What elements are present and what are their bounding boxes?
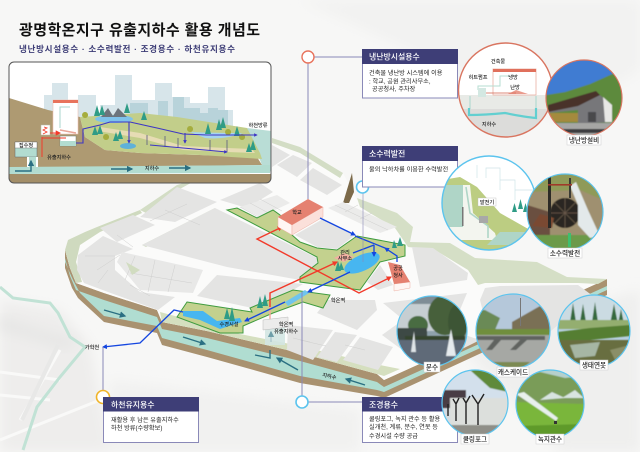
waterfall rocks [101, 108, 127, 117]
stream: 가학천 [0, 287, 85, 450]
photo: 생태연못 [558, 295, 630, 368]
diagram circle: 냉난방 시스템 [458, 43, 554, 139]
node: 하천유지 [96, 390, 110, 404]
map labels: 학온역 [331, 296, 345, 304]
map labels: 수경시설 [219, 320, 239, 328]
photo: 냉난방설비 [546, 60, 622, 137]
connector lines [103, 57, 363, 402]
water: pond and stream [183, 248, 383, 329]
panel: 조경용수: 실개천, 계류, 분수, 연못 등 [369, 423, 438, 431]
panel: 조경용수: 조경용수 [369, 400, 398, 410]
building: 공공청사: 공공 [393, 265, 403, 272]
small green in housing [126, 262, 140, 275]
subtitle: 냉난방시설용수 · 소수력발전 · 조경용수 · 하천유지용수 [19, 43, 235, 54]
building: 공공청사 [388, 262, 410, 291]
storage tank [60, 136, 76, 146]
title: 광명학온지구 유출지하수 활용 개념도 [19, 22, 260, 39]
building: 관리사무소: 관리 [340, 248, 350, 256]
building: 학교: 학교 [292, 208, 302, 216]
caption: 생태연못 [580, 360, 608, 370]
building: 공공청사: 청사 [393, 271, 403, 279]
river edge [247, 128, 271, 172]
rock cliff [343, 173, 354, 203]
groundwater flow arrows [104, 310, 365, 385]
blue inset flow [76, 122, 257, 152]
inset labels: 하천방류 [248, 121, 268, 129]
collection well [15, 141, 38, 167]
red heating line [42, 133, 66, 157]
skyline [44, 75, 233, 126]
inset labels: 지하수 [145, 164, 159, 172]
collection well: 집수정 [19, 141, 33, 149]
panel: 냉난방시설용수 [362, 49, 458, 98]
caption: 캐스케이드: 캐스케이드 [498, 368, 528, 376]
panel: 냉난방시설용수: : 학교, 공원 관리사무소, [369, 78, 431, 86]
panel: 소수력발전: 소수력발전 [369, 148, 405, 158]
pond and upper water [95, 115, 243, 149]
caption: 생태연못: 생태연못 [582, 360, 606, 370]
panel: 소수력발전 [362, 146, 458, 187]
building [53, 100, 78, 134]
panel: 하천유지용수: 하천 방류(수량확보) [111, 424, 162, 432]
map labels [85, 296, 345, 381]
map labels: 지하수 [322, 371, 337, 381]
panel: 하천유지용수: 하천유지용수 [111, 400, 155, 410]
heat pump [41, 125, 50, 135]
groundwater collection: 학온역 유출지하수: 유출지하수 [274, 327, 298, 335]
diagram circle: 냉난방 시스템: 냉방 [508, 73, 518, 81]
brown ground [9, 98, 262, 168]
caption: 소수력발전: 소수력발전 [550, 248, 580, 258]
caption: 분수 [424, 362, 440, 372]
building: 관리사무소 [334, 248, 354, 262]
caption: 쿨링포그 [461, 434, 489, 444]
green terrain [80, 113, 262, 159]
park greens [177, 208, 405, 333]
panel: 조경용수: 쿨링포그, 녹지 관수 등 활용 [369, 415, 441, 423]
inset panel: conceptual cross-section [9, 62, 271, 183]
node: 소수력 [356, 181, 368, 193]
arrows: blue discharge network [103, 218, 397, 347]
caption: 녹지관수 [536, 434, 564, 444]
panel: 소수력발전: 물의 낙하차를 이용한 수력발전 [369, 166, 448, 174]
panel: 하천유지용수 [103, 397, 199, 442]
groundwater collection: 학온역 유출지하수: 학온역 [279, 320, 293, 328]
panel: 냉난방시설용수: 공공청사, 주차장 [372, 85, 416, 93]
panel: 냉난방시설용수: 건축물 냉난방 시스템에 이용 [369, 69, 443, 77]
photo: 녹지관수 [516, 370, 584, 438]
inset trees [92, 103, 256, 152]
panel: 조경용수 [362, 397, 458, 442]
groundwater collection: 학온역 유출지하수 [263, 317, 298, 345]
groundwater arrows [15, 161, 190, 171]
caption: 분수: 분수 [426, 364, 438, 372]
caption: 쿨링포그: 쿨링포그 [463, 434, 487, 444]
caption: 냉난방설비 [567, 135, 601, 145]
diagram circle: 냉난방 시스템: 건축물 [491, 57, 505, 65]
photo: 캐스케이드 [476, 294, 552, 371]
node: 조경 [296, 396, 308, 408]
arrows: red supply network [257, 227, 391, 322]
trees [224, 237, 403, 321]
site block: top surface [65, 138, 607, 380]
caption: 녹지관수: 녹지관수 [538, 434, 562, 444]
photo: 소수력발전 [527, 174, 603, 250]
panel: 냉난방시설용수: 냉난방시설용수 [369, 52, 420, 62]
inset labels: 유출지하수 [47, 153, 71, 161]
land parcels [77, 145, 593, 370]
diagram circle: 냉난방 시스템: 히트펌프 [468, 73, 488, 81]
site block: strata layers [65, 250, 607, 398]
diagram circle: 냉난방 시스템: 지하수 [482, 120, 496, 128]
building: 학교 [278, 199, 323, 235]
diagram circle: 소수력 발전기: 발전기 [480, 198, 494, 206]
caption: 냉난방설비: 냉난방설비 [569, 136, 599, 144]
caption: 캐스케이드 [497, 367, 529, 377]
panel: 하천유지용수: 재활용 후 남은 유출지하수 [111, 416, 179, 424]
teal aquifer [9, 165, 270, 174]
panel: 조경용수: 수경시설 수량 공급 [369, 432, 418, 440]
lower soil [9, 174, 271, 183]
photo: 쿨링포그 [442, 370, 508, 437]
building: 관리사무소: 사무소 [338, 254, 352, 262]
inset labels [47, 121, 268, 172]
parcel detail lines [85, 199, 388, 350]
map labels: 가학천 [85, 343, 99, 351]
tan path [98, 127, 255, 153]
photo: 분수 [397, 295, 468, 366]
caption: 소수력발전 [548, 248, 582, 258]
diagram circle: 소수력 발전기 [442, 156, 536, 252]
diagram circle: 냉난방 시스템: 난방 [510, 83, 520, 91]
node: 냉난방 [302, 51, 314, 63]
